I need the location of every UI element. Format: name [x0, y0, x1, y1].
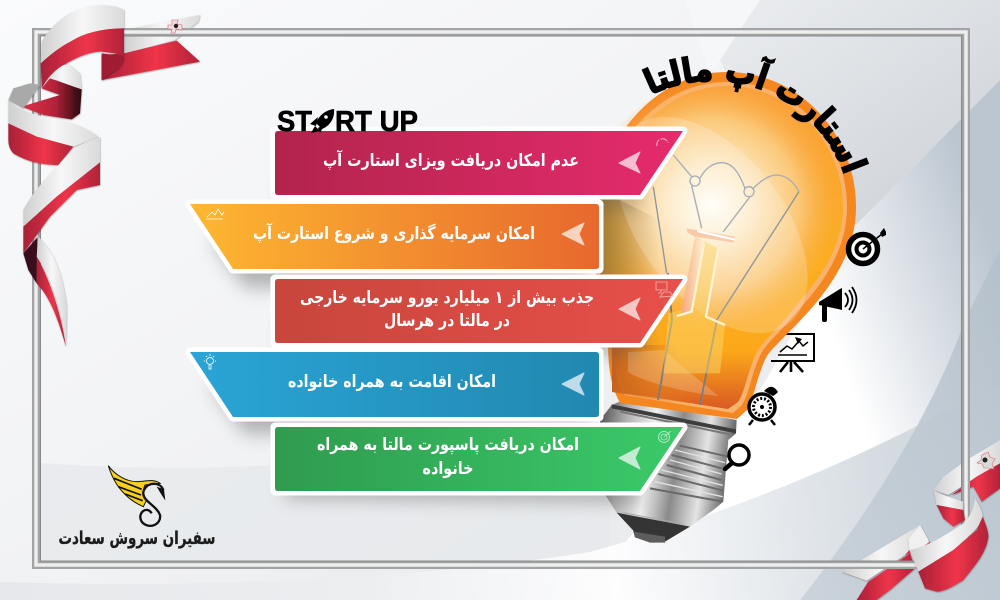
banner text: جذب بیش از ۱ میلیارد یورو سرمایه خارجی: [300, 288, 594, 308]
icon: headset: [657, 139, 668, 146]
bulb base: [600, 400, 737, 543]
arrow marker: [619, 298, 640, 320]
icon: target: [848, 228, 886, 264]
icon: presentation board: [771, 334, 814, 372]
banner 3: foreign investment: در مالتا در هرسال: [384, 311, 510, 331]
start up heading: [277, 106, 418, 138]
bulb glass body: [600, 86, 843, 409]
banner 3: foreign investment: [275, 279, 683, 343]
curved title: استارت آپ مالتا: [642, 56, 870, 174]
banner text: امکان اقامت به همراه خانواده: [288, 372, 496, 392]
banner 5: passport: خانواده: [422, 459, 474, 479]
start up heading: RT UP: [335, 106, 418, 138]
banner text: امکان سرمایه گذاری و شروع استارت آپ: [253, 222, 535, 244]
banner 5: passport: [275, 427, 683, 491]
ribbon: bottom right: [908, 490, 988, 592]
icon: monitor: [656, 282, 673, 297]
arrow marker: [619, 447, 640, 469]
flag emblem: top left: [168, 20, 182, 33]
bulb glass inner ring: [596, 82, 847, 413]
filament wires: [653, 155, 799, 320]
icon: target: [658, 431, 671, 442]
icon: megaphone: [819, 287, 856, 322]
icon: alarm clock: [749, 387, 778, 425]
arrow marker: [562, 373, 584, 395]
flag emblem: bottom right: [977, 452, 995, 469]
logo bird body: [140, 484, 165, 526]
banner text: امکان دریافت پاسپورت مالتا به همراه: [317, 435, 579, 455]
logo wing: [108, 466, 160, 507]
glass stem: [663, 228, 735, 373]
light bulb: [578, 72, 856, 543]
icon: magnifier: [725, 445, 749, 469]
icon: lightbulb: [204, 354, 216, 369]
arrow marker: [562, 223, 584, 245]
arrow marker: [619, 152, 640, 173]
icon: rocket: [310, 109, 334, 133]
banner 4: residence: [190, 352, 599, 417]
start up heading: ST: [277, 106, 312, 138]
banner 2: investment: [190, 204, 599, 269]
logo wordmark: سفیران سروش سعادت: [58, 528, 216, 549]
bulb glass rim: [591, 72, 856, 419]
ribbon: top left: [8, 5, 124, 347]
banner text: عدم امکان دریافت ویزای استارت آپ: [323, 149, 579, 171]
logo: [58, 466, 216, 549]
banner 1: visa: [275, 131, 683, 195]
icon: chart: [206, 209, 224, 219]
banner shadows: [210, 175, 640, 502]
